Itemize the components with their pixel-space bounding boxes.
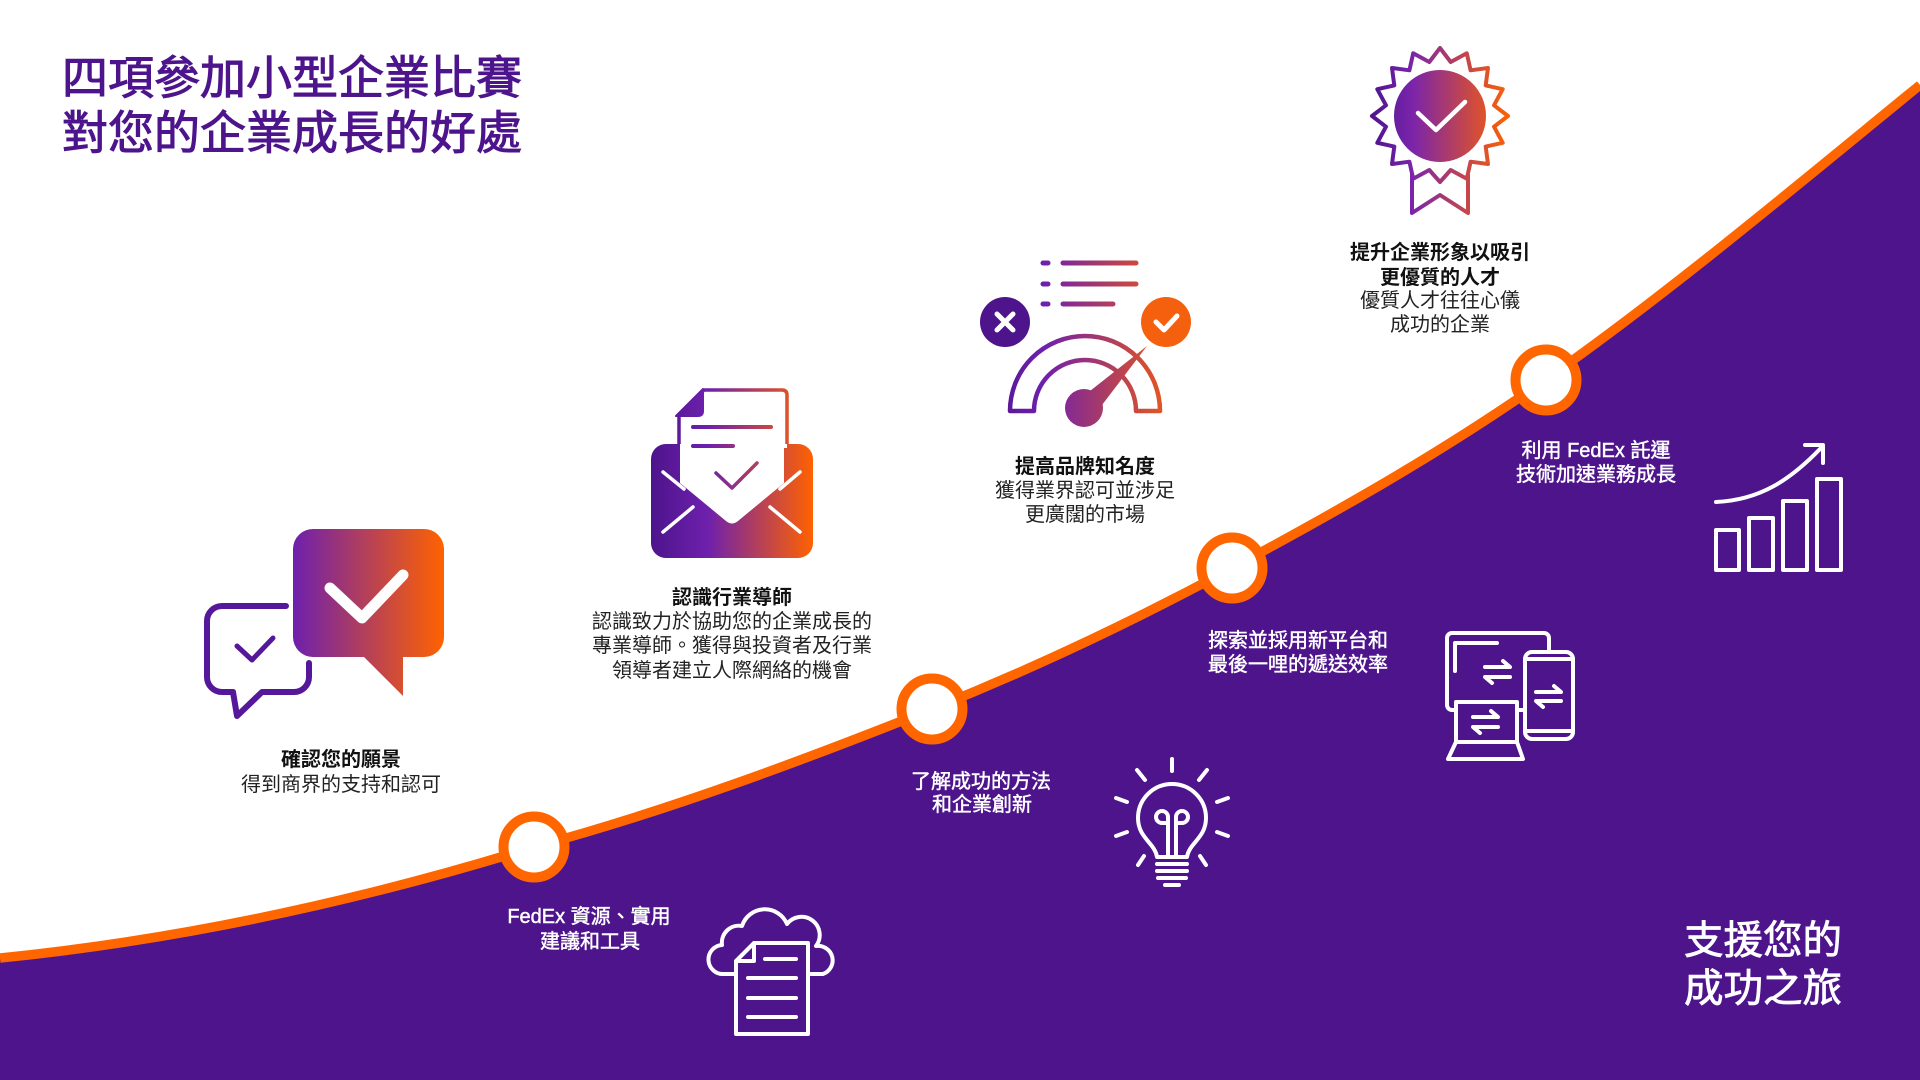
text: innovation: 和企業創新 bbox=[932, 793, 1032, 816]
title bbox=[62, 52, 522, 159]
text: FedEx shipping: 技術加速業務成長 bbox=[1516, 463, 1676, 486]
text: FedEx shipping bbox=[1516, 439, 1676, 486]
icon: connected devices bbox=[1447, 633, 1573, 759]
icon: growth bar chart bbox=[1716, 445, 1841, 570]
closing message: 支援您的 bbox=[1684, 919, 1842, 963]
text: talent bbox=[1350, 240, 1530, 336]
text: mentors: 專業導師。獲得與投資者及行業 bbox=[592, 634, 872, 657]
text: talent: 成功的企業 bbox=[1390, 313, 1490, 336]
text: mentors: 領導者建立人際網絡的機會 bbox=[612, 659, 852, 682]
text: new platforms bbox=[1208, 629, 1388, 676]
title: 四項參加小型企業比賽 bbox=[62, 52, 522, 104]
text: mentors: 認識致力於協助您的企業成長的 bbox=[592, 610, 872, 633]
text: talent: 優質人才往往心儀 bbox=[1360, 289, 1520, 312]
curve milestones bbox=[504, 350, 1576, 878]
icon: award badge bbox=[1372, 48, 1508, 213]
icon: cloud document bbox=[708, 909, 833, 1034]
text: brand awareness: 獲得業界認可並涉足 bbox=[995, 479, 1175, 502]
text: FedEx shipping: 利用 FedEx 託運 bbox=[1522, 439, 1670, 462]
text: new platforms: 探索並採用新平台和 bbox=[1208, 629, 1388, 652]
text: mentors: 認識行業導師 bbox=[672, 586, 792, 609]
closing message: 成功之旅 bbox=[1684, 967, 1842, 1011]
text: vision bbox=[241, 748, 441, 796]
text: brand awareness bbox=[995, 454, 1175, 526]
title: 對您的企業成長的好處 bbox=[62, 107, 522, 159]
text: brand awareness: 提高品牌知名度 bbox=[1015, 454, 1155, 478]
closing message bbox=[1684, 919, 1842, 1011]
text: talent: 更優質的人才 bbox=[1380, 266, 1500, 289]
text: FedEx resources bbox=[507, 905, 671, 953]
text: mentors bbox=[592, 586, 872, 682]
text: brand awareness: 更廣闊的市場 bbox=[1025, 503, 1145, 526]
text: FedEx resources: 建議和工具 bbox=[540, 930, 640, 953]
text: FedEx resources: FedEx 資源、實用 bbox=[507, 905, 671, 928]
text: innovation: 了解成功的方法 bbox=[911, 770, 1051, 793]
icon: gauge with checklist bbox=[980, 263, 1191, 427]
icon: envelope with document bbox=[651, 389, 813, 558]
icon: light bulb bbox=[1116, 759, 1228, 885]
icon: speech bubbles with checks bbox=[207, 529, 444, 716]
text: innovation bbox=[911, 770, 1051, 816]
text: vision: 確認您的願景 bbox=[281, 748, 401, 771]
text: vision: 得到商界的支持和認可 bbox=[241, 773, 441, 796]
text: new platforms: 最後一哩的遞送效率 bbox=[1208, 653, 1388, 676]
text: talent: 提升企業形象以吸引 bbox=[1350, 240, 1530, 264]
